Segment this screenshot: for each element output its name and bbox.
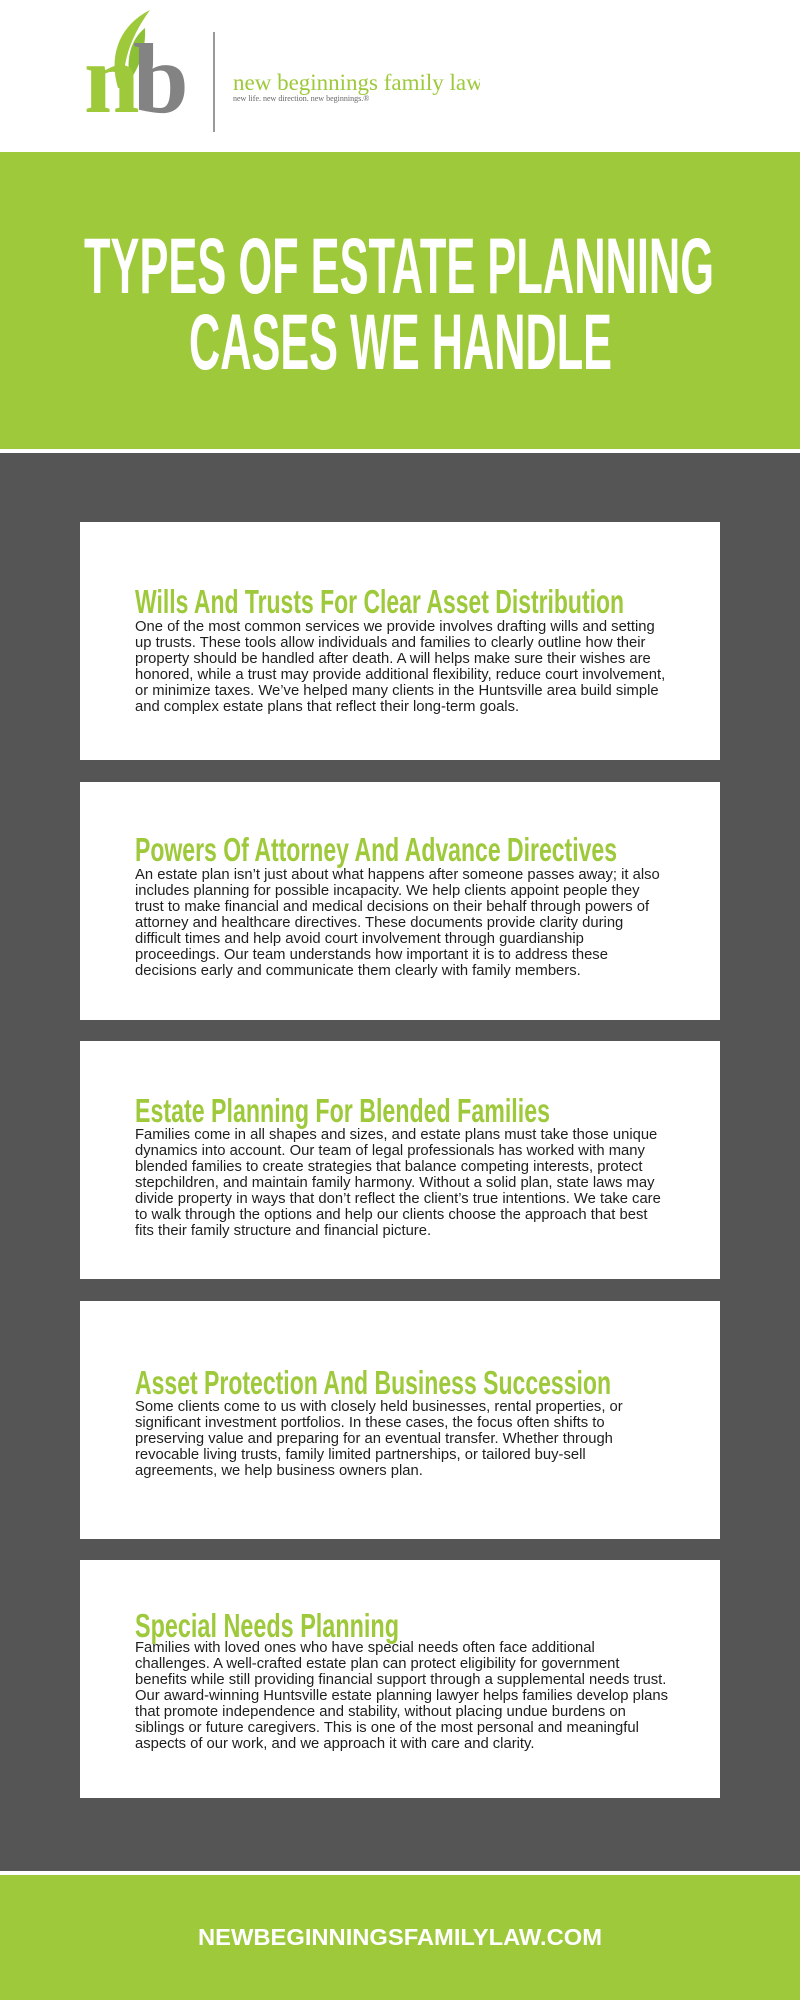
text: special needs: benefits while still providing financial support through a supplemental needs trust. [135,1672,666,1688]
text: asset protection: preserving value and preparing for an eventual transfer. Whether through [135,1431,613,1447]
text: powers of attorney: proceedings. Our team understands how important it is to address these [135,947,608,963]
logo [84,10,480,134]
text: wills and trusts: honored, while a trust may provide additional flexibility, reduce court involvement, [135,667,665,683]
text: wills and trusts: One of the most common services we provide involves drafting wills and setting [135,619,655,635]
text: wills and trusts [135,619,665,715]
panel: asset protection [80,1301,720,1539]
text: special needs: Our award-winning Huntsville estate planning lawyer helps families develop plans [135,1688,668,1704]
text: wills and trusts: property should be handled after death. A will helps make sure their wishes are [135,651,651,667]
text: special needs [135,1640,668,1752]
text: powers of attorney: attorney and healthcare directives. These documents provide clarity during [135,915,623,931]
text: asset protection [135,1399,623,1479]
text: blended families: stepchildren, and maintain family harmony. Without a solid plan, state laws may [135,1175,655,1191]
text: asset protection: Some clients come to us with closely held businesses, rental properties, or [135,1399,623,1415]
dark content background [0,453,800,1871]
text: special needs: aspects of our work, and we approach it with care and clarity. [135,1736,534,1752]
footer url: NEWBEGINNINGSFAMILYLAW.COM [198,1924,602,1950]
footer [0,1875,800,2000]
text: wills and trusts: up trusts. These tools allow individuals and families to clearly outline how their [135,635,645,651]
text: blended families: to walk through the options and help our clients choose the approach that best [135,1207,647,1223]
panel: blended families [80,1041,720,1279]
text: powers of attorney: includes planning for possible incapacity. We help clients appoint people they [135,883,640,899]
text: blended families: dynamics into account. Our team of legal professionals has worked with many [135,1143,645,1159]
text: powers of attorney: An estate plan isn’t just about what happens after someone passes away; it also [135,867,660,883]
heading: blended families: Estate Planning For Blended Families [135,1092,550,1129]
text: powers of attorney [135,867,660,979]
logo text: new beginnings family law [233,70,480,95]
text: blended families [135,1127,661,1239]
icon: leaf nb monogram: b [133,23,189,134]
heading: asset protection: Asset Protection And Business Succession [135,1364,611,1401]
title banner [0,152,800,449]
panel: powers of attorney [80,782,720,1020]
text: powers of attorney: difficult times and help avoid court involvement through guardianship [135,931,584,947]
heading: special needs: Special Needs Planning [135,1607,399,1644]
text: blended families: fits their family structure and financial picture. [135,1223,431,1239]
text: powers of attorney: trust to make financial and medical decisions on their behalf through powers of [135,899,649,915]
text: special needs: challenges. A well-crafted estate plan can protect eligibility for government [135,1656,619,1672]
icon: leaf nb monogram: n [84,23,140,134]
icon: leaf nb monogram [84,10,189,134]
text: asset protection: agreements, we help business owners plan. [135,1463,423,1479]
text: blended families: divide property in ways that don’t reflect the client’s true intentions. We take care [135,1191,661,1207]
text: special needs: siblings or future caregivers. This is one of the most personal and meaningful [135,1720,639,1736]
panel: wills and trusts [80,522,720,760]
text: blended families: blended families to create strategies that balance competing interests, protect [135,1159,642,1175]
text: wills and trusts: and complex estate plans that reflect their long-term goals. [135,699,519,715]
text: asset protection: revocable living trusts, family limited partnerships, or tailored buy-sell [135,1447,586,1463]
text: wills and trusts: or minimize taxes. We’ve helped many clients in the Huntsville area build simple [135,683,659,699]
text: asset protection: significant investment portfolios. In these cases, the focus often shifts to [135,1415,605,1431]
logo text: new life. new direction. new beginnings.® [233,94,369,103]
text: blended families: Families come in all shapes and sizes, and estate plans must take those unique [135,1127,657,1143]
text: powers of attorney: decisions early and communicate them clearly with family members. [135,963,581,979]
text: special needs: that promote independence and stability, without placing undue burdens on [135,1704,626,1720]
title [84,221,714,386]
panel: special needs [80,1560,720,1798]
text: special needs: Families with loved ones who have special needs often face additional [135,1640,595,1656]
